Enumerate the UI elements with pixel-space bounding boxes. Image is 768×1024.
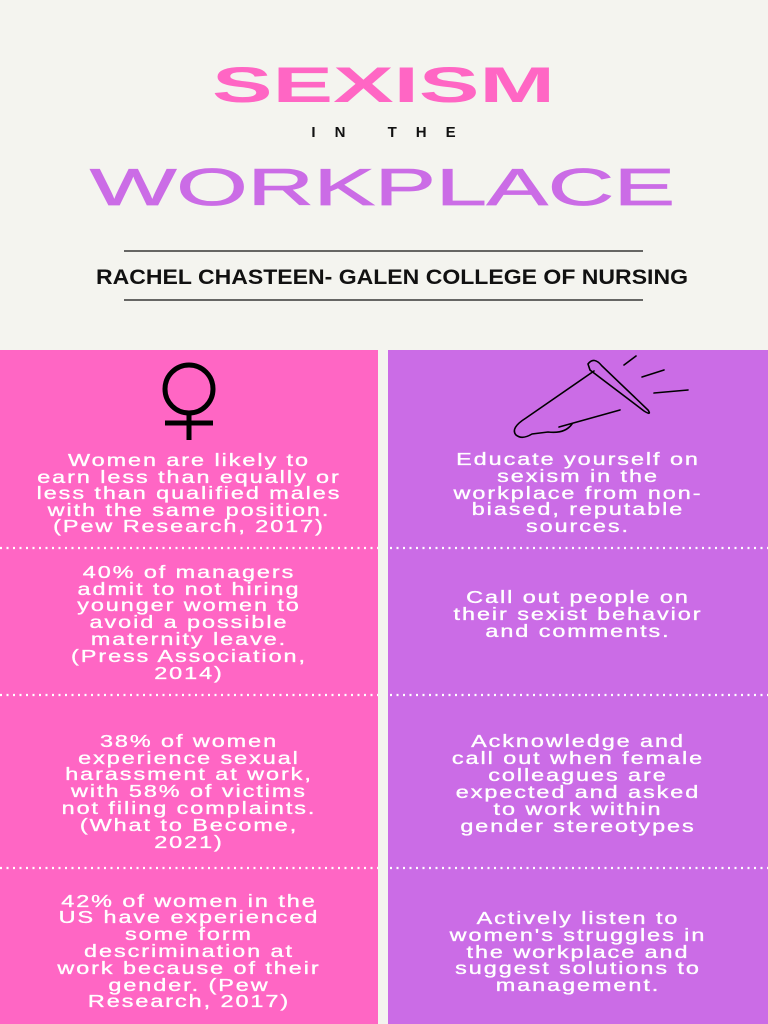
fact texts: (What to Become, [80,815,298,835]
action texts: biased, reputable [472,499,684,519]
action texts: their sexist behavior [454,604,702,624]
action texts: call out when female [452,748,704,768]
fact texts: younger women to [77,595,301,615]
action texts: the workplace and [467,942,689,962]
action texts: sexism in the [497,466,659,486]
title: IN THE [311,124,475,141]
fact texts: maternity leave. [91,629,287,649]
action texts: Actively listen to [477,908,679,928]
fact texts: (Pew Research, 2017) [53,516,325,536]
fact texts: admit to not hiring [78,579,300,599]
fact texts: 2021) [154,832,224,852]
fact texts: some form [125,924,253,944]
fact texts: avoid a possible [90,612,288,632]
action texts: to work within [494,799,662,819]
fact texts: Research, 2017) [88,991,290,1011]
fact texts: with the same position. [47,500,330,520]
fact texts: experience sexual [78,748,300,768]
fact texts: US have experienced [59,907,319,927]
title [90,57,675,217]
fact texts: 42% of women in the [61,891,317,911]
fact texts: Women are likely to [68,450,310,470]
action texts: workplace from non- [452,483,702,503]
title: SEXISM [212,57,555,113]
fact texts: 40% of managers [83,562,295,582]
action texts: gender stereotypes [460,816,696,836]
action texts: expected and asked [456,782,700,802]
fact texts: descrimination at [84,941,294,961]
action texts: Acknowledge and [471,731,685,751]
icon: megaphone [514,356,688,437]
action texts: Educate yourself on [456,449,700,469]
action texts [449,449,706,995]
fact texts: with 58% of victims [70,781,307,801]
title: WORKPLACE [90,159,675,217]
fact texts: less than qualified males [37,483,341,503]
fact texts: 38% of women [100,731,278,751]
panel: actions (purple) [388,350,768,1024]
fact texts: harassment at work, [65,764,313,784]
fact texts: gender. (Pew [108,975,270,995]
fact texts: earn less than equally or [37,467,341,487]
action texts: and comments. [485,621,671,641]
fact texts: (Press Association, [71,646,307,666]
fact texts: 2014) [154,663,224,683]
subtitle: RACHEL CHASTEEN- GALEN COLLEGE OF NURSING [96,266,688,289]
action texts: Call out people on [466,587,690,607]
action texts: suggest solutions to [455,958,701,978]
panel: facts (pink) [0,350,378,1024]
fact texts [37,450,341,1011]
action texts: sources. [526,516,630,536]
fact texts: work because of their [56,958,321,978]
action texts: management. [496,975,660,995]
action texts: women's struggles in [449,925,706,945]
action texts: colleagues are [488,765,668,785]
fact texts: not filing complaints. [62,798,316,818]
icon: female symbol [165,365,213,440]
